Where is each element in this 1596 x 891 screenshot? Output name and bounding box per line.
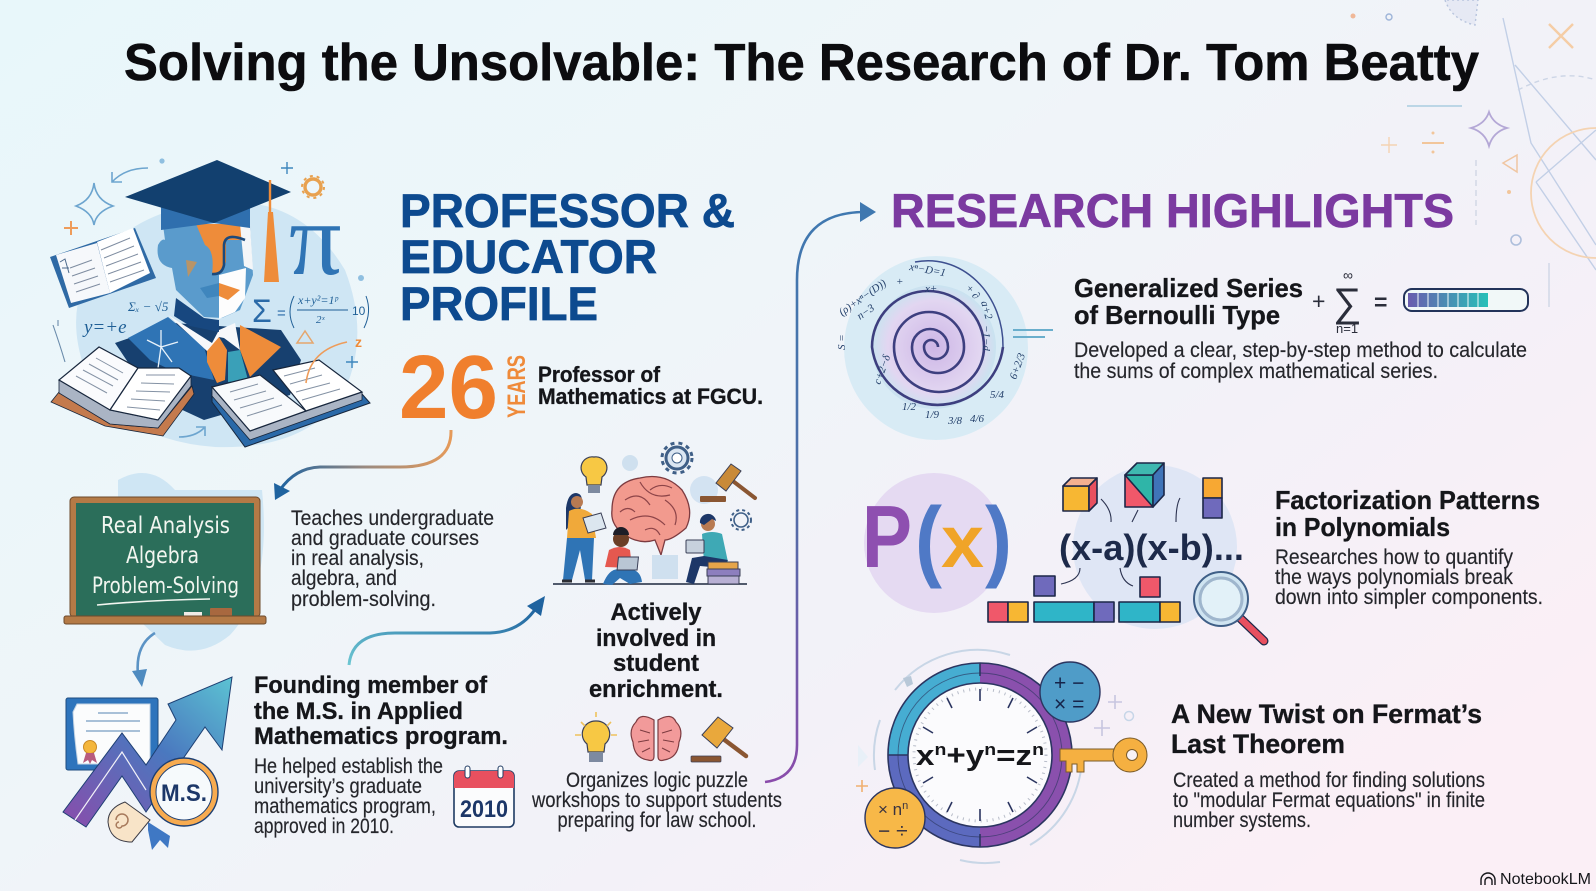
text: Fermat's last theorem: A New Twist on Fermat’s bbox=[1171, 699, 1482, 729]
icon: modular clock with key: n bbox=[902, 800, 908, 812]
icon: P(x) factorization: ( bbox=[915, 490, 942, 590]
profile heading: EDUCATOR bbox=[400, 230, 657, 283]
profile heading: PROFESSOR & bbox=[400, 184, 735, 237]
icon: modular clock with key: + − bbox=[1054, 672, 1084, 695]
icon: formula spiral: (ρ)+xⁿ−(D)) bbox=[837, 277, 889, 318]
text: student enrichment: involved in bbox=[596, 625, 716, 652]
text: student enrichment: student bbox=[613, 650, 699, 677]
icon: diploma, growth arrow and M.S. seal bbox=[63, 677, 232, 850]
text: student enrichment bbox=[531, 599, 782, 832]
text: generalized series: of Bernoulli Type bbox=[1074, 300, 1280, 330]
pi symbol: π bbox=[289, 182, 342, 297]
profile heading: PROFILE bbox=[400, 277, 598, 330]
icon: modular clock with key bbox=[856, 650, 1147, 863]
icon: modular clock with key: n bbox=[934, 740, 946, 759]
icon: formula spiral: 5/4 bbox=[990, 389, 1005, 401]
text: generalized series: Generalized Series bbox=[1074, 273, 1303, 303]
gear bbox=[666, 447, 688, 469]
text: founding member: mathematics program, bbox=[254, 795, 436, 818]
title: Solving the Unsolvable: The Research of Dr. Tom Beatty bbox=[124, 34, 1479, 92]
key bbox=[1060, 749, 1116, 772]
stat: 26 years: Mathematics at FGCU. bbox=[538, 384, 763, 409]
icon: P(x) factorization: (x-a)(x-b)... bbox=[1059, 527, 1244, 568]
icon: summation and progress bar: ∞ bbox=[1343, 267, 1353, 283]
text: student enrichment: workshops to support students bbox=[531, 789, 782, 812]
open books bbox=[50, 228, 370, 447]
text: courses taught: Teaches undergraduate bbox=[291, 507, 494, 530]
brain bbox=[612, 476, 690, 555]
icon: calendar 2010 bbox=[454, 766, 514, 827]
panel: professor profile bbox=[50, 158, 876, 850]
text: Fermat's last theorem: to "modular Fermat equations" in finite bbox=[1173, 789, 1485, 812]
icon: modular clock with key: n bbox=[984, 740, 996, 759]
yellow operators badge bbox=[865, 788, 925, 848]
tassel bbox=[269, 180, 271, 212]
icon: formula spiral: S = bbox=[836, 334, 848, 350]
text: founding member: He helped establish the bbox=[254, 755, 443, 778]
formulas: = bbox=[277, 305, 286, 322]
stat: 26 years: YEARS bbox=[503, 355, 531, 418]
text: courses taught: and graduate courses bbox=[291, 527, 479, 550]
text: factorization patterns: Factorization Patterns bbox=[1275, 485, 1540, 515]
gavel bbox=[725, 475, 755, 498]
blue operators badge bbox=[1040, 662, 1100, 722]
text: generalized series bbox=[1074, 273, 1527, 383]
icon: summation and progress bar: + bbox=[1312, 288, 1325, 314]
icon: professor portrait with books and formulas bbox=[50, 158, 370, 447]
icon: modular clock with key: − ÷ bbox=[878, 820, 908, 843]
icon: modular clock with key: +y bbox=[946, 740, 984, 772]
stat: 26 years bbox=[399, 338, 763, 438]
icon: formula spiral: + ∂ bbox=[963, 282, 982, 302]
neck and body bbox=[115, 323, 301, 420]
icon: formula spiral: 1/2 bbox=[902, 401, 917, 413]
watermark: NotebookLM: NotebookLM bbox=[1500, 871, 1591, 888]
arrow: program to enrichment bbox=[349, 596, 545, 665]
icon: formula spiral: + bbox=[896, 276, 903, 288]
icon: modular clock with key: x bbox=[916, 740, 932, 772]
icon: P(x) factorization bbox=[862, 463, 1264, 641]
text: courses taught: algebra, and bbox=[291, 567, 397, 590]
illustration: students, brain and law icons bbox=[553, 443, 755, 585]
icon: summation and progress bar: n=1 bbox=[1336, 321, 1358, 336]
icon: formula spiral: n−3 bbox=[855, 302, 877, 322]
text: Fermat's last theorem: number systems. bbox=[1173, 809, 1311, 832]
research heading: RESEARCH HIGHLIGHTS bbox=[891, 184, 1454, 237]
icon: formula spiral: 4/6 bbox=[970, 413, 985, 425]
icon: chalkboard: Problem-Solving bbox=[92, 574, 239, 599]
text: courses taught: problem-solving. bbox=[291, 588, 436, 611]
icon: formula spiral: −1−d bbox=[980, 325, 992, 351]
face bbox=[158, 225, 253, 318]
cubes bbox=[988, 463, 1222, 622]
stat: 26 years: 26 bbox=[399, 338, 498, 438]
text: Fermat's last theorem: Created a method for finding solutions bbox=[1173, 769, 1485, 792]
text: courses taught bbox=[291, 507, 494, 611]
icon: diploma, growth arrow and M.S. seal: M.S. bbox=[161, 780, 207, 807]
text: factorization patterns: Researches how to quantify bbox=[1275, 546, 1513, 569]
panel: research highlights bbox=[836, 184, 1543, 863]
text: founding member: Mathematics program. bbox=[254, 723, 508, 750]
icon: calendar 2010: 2010 bbox=[460, 796, 508, 823]
formulas: y=+e bbox=[82, 317, 127, 338]
icon: P(x) factorization: ) bbox=[985, 490, 1012, 590]
woman with tablet bbox=[566, 493, 582, 530]
arrow: teaching to program bbox=[132, 633, 155, 687]
formulas: Σₓ − √5 bbox=[127, 299, 169, 314]
text: founding member: the M.S. in Applied bbox=[254, 698, 463, 725]
icon: summation and progress bar: = bbox=[1374, 289, 1387, 315]
student on books bbox=[701, 517, 715, 531]
icon: formula spiral: c+2−δ bbox=[872, 353, 893, 386]
icon: modular clock with key: × n bbox=[878, 800, 902, 819]
icon: formula spiral bbox=[836, 256, 1053, 440]
icon: P(x) factorization: x bbox=[941, 500, 984, 583]
icon: chalkboard: Algebra bbox=[126, 543, 199, 569]
icon: formula spiral: xⁿ−D=1 bbox=[907, 261, 947, 279]
decorative geometry top right bbox=[1350, 0, 1596, 307]
icon: summation and progress bar: ∑ bbox=[1333, 281, 1362, 325]
icon: formula spiral: 1/9 bbox=[925, 409, 940, 421]
formulas bbox=[53, 293, 369, 383]
text: courses taught: in real analysis, bbox=[291, 547, 424, 570]
text: factorization patterns: in Polynomials bbox=[1275, 512, 1450, 542]
icon: P(x) factorization: P bbox=[862, 487, 912, 586]
icon: formula spiral: x+ bbox=[924, 283, 937, 295]
formulas: z bbox=[355, 334, 362, 350]
formulas: 2ˣ bbox=[316, 314, 326, 326]
text: Fermat's last theorem bbox=[1171, 699, 1485, 832]
arrow: enrichment to research bbox=[765, 202, 876, 782]
text: factorization patterns: the ways polynomials break bbox=[1275, 566, 1513, 589]
profile heading bbox=[400, 184, 735, 330]
icon: modular clock with key: =z bbox=[996, 740, 1032, 772]
text: generalized series: the sums of complex mathematical series. bbox=[1074, 360, 1438, 383]
text: student enrichment: Organizes logic puzzle bbox=[566, 769, 748, 792]
magnifying glass bbox=[1240, 618, 1264, 641]
text: factorization patterns bbox=[1275, 485, 1543, 609]
icon: modular clock with key: n bbox=[1032, 740, 1044, 759]
icon: formula spiral: 3/8 bbox=[947, 415, 963, 427]
icon: formula spiral: 6+2/3 bbox=[1008, 351, 1028, 381]
text: generalized series: Developed a clear, step-by-step method to calculate bbox=[1074, 339, 1527, 362]
text: student enrichment: Actively bbox=[610, 599, 702, 626]
graduation cap bbox=[161, 198, 250, 230]
icon: summation and progress bar bbox=[1312, 267, 1528, 336]
sparkle marks bbox=[1094, 695, 1122, 736]
text: founding member bbox=[254, 672, 508, 838]
icon: chalkboard: Real Analysis bbox=[101, 513, 230, 539]
seated student with laptop bbox=[613, 531, 629, 547]
text: student enrichment: enrichment. bbox=[589, 676, 723, 703]
arrow: years to teaching bbox=[274, 430, 451, 500]
text: founding member: university’s graduate bbox=[254, 775, 422, 798]
text: Fermat's last theorem: Last Theorem bbox=[1171, 729, 1345, 759]
text: founding member: approved in 2010. bbox=[254, 815, 394, 838]
formulas: x+y²=1ᵖ bbox=[297, 293, 338, 307]
text: founding member: Founding member of bbox=[254, 672, 488, 699]
icon: formula spiral: a+2 bbox=[978, 300, 995, 321]
sparkles and gear bbox=[64, 158, 364, 437]
icon: chalkboard bbox=[64, 473, 266, 651]
icons: bulb, brain, gavel bbox=[575, 712, 746, 762]
stat: 26 years: Professor of bbox=[538, 362, 661, 387]
lightbulb bbox=[581, 457, 607, 485]
formulas: Σ bbox=[252, 293, 272, 329]
formulas: 10 bbox=[352, 304, 366, 318]
icon: modular clock with key: × = bbox=[1054, 693, 1084, 716]
text: factorization patterns: down into simpler components. bbox=[1275, 586, 1543, 609]
text: student enrichment: preparing for law school. bbox=[558, 809, 756, 832]
